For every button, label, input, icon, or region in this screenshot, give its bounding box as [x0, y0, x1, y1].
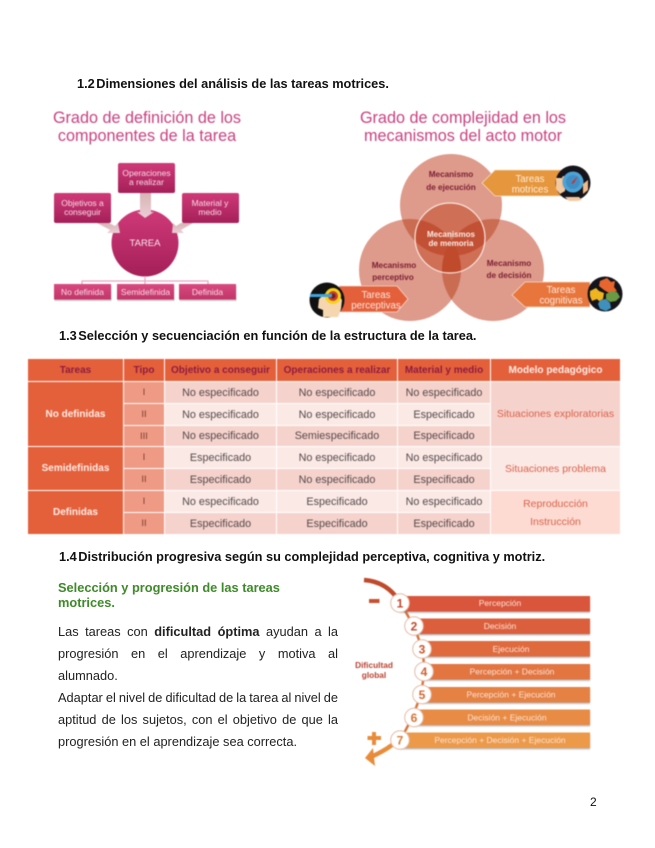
table: seleccion y secuenciacion: Semiespecificado — [295, 430, 379, 442]
table: seleccion y secuenciacion: No especificado — [182, 496, 259, 508]
text block: tareas con dificultad optima: progresión en el aprendizaje sea correcta. — [58, 734, 297, 749]
table: seleccion y secuenciacion: Instrucción — [530, 516, 581, 528]
table: seleccion y secuenciacion: Especificado — [413, 430, 475, 442]
diagram title: Grado de definición de los — [53, 109, 241, 127]
label: mecanismo de decision: de decisión — [486, 271, 532, 280]
step 4: percepcion + decision: Percepción + Decisión — [470, 666, 555, 676]
box: no definida — [54, 284, 112, 301]
box: objetivos a conseguir: conseguir — [64, 207, 101, 217]
label: dificultad global: global — [362, 670, 386, 680]
table: seleccion y secuenciacion: No especificado — [406, 452, 482, 464]
box: material y medio — [182, 193, 239, 223]
step 3: ejecucion — [413, 640, 590, 658]
table: seleccion y secuenciacion: I — [143, 452, 145, 463]
step 7: percepcion + decision + ejecucion: Percepción + Decisión + Ejecución — [434, 735, 566, 745]
step 6: decision + ejecucion: Decisión + Ejecución — [467, 712, 547, 722]
step 5: percepcion + ejecucion: 5 — [419, 688, 426, 702]
step 2: decision — [405, 617, 590, 635]
table: seleccion y secuenciacion: Especificado — [413, 408, 475, 420]
curved arrow spine — [364, 580, 424, 766]
diagram: grado de complejidad — [308, 110, 624, 322]
table: seleccion y secuenciacion: Especificado — [306, 518, 368, 530]
venn circles — [359, 154, 544, 321]
table: seleccion y secuenciacion: No especificado — [299, 408, 375, 420]
table: seleccion y secuenciacion: No especificado — [299, 474, 375, 486]
table: seleccion y secuenciacion: Modelo pedagógico — [509, 364, 602, 376]
box: objetivos a conseguir — [54, 193, 111, 223]
table: seleccion y secuenciacion: Operaciones a realizar — [284, 364, 390, 376]
arrow: tareas motrices — [482, 170, 563, 196]
subheading: seleccion y progresion: Selección y progresión de las tareas — [58, 580, 280, 595]
diagram title — [360, 109, 566, 145]
text block: tareas con dificultad optima: aptitud de los sujetos, con el objetivo de que la — [58, 712, 338, 727]
table: seleccion y secuenciacion: No especificado — [182, 386, 259, 398]
table: seleccion y secuenciacion: Especificado — [190, 452, 251, 464]
box: objetivos a conseguir: Objetivos a — [61, 198, 104, 208]
box: operaciones a realizar — [118, 163, 175, 193]
box: definida: Definida — [192, 287, 223, 297]
table: seleccion y secuenciacion: No especificado — [299, 386, 375, 398]
box: operaciones a realizar: Operaciones — [122, 168, 171, 178]
label: mecanismo perceptivo: perceptivo — [372, 273, 414, 282]
diagram title: mecanismos del acto motor — [364, 127, 563, 145]
step 7: percepcion + decision + ejecucion: 7 — [397, 734, 404, 748]
table: seleccion y secuenciacion: I — [143, 387, 145, 398]
table: seleccion y secuenciacion: III — [140, 430, 148, 442]
circle: tarea — [112, 210, 178, 276]
box: material y medio: medio — [198, 207, 222, 217]
heading 1.2: 1.2Dimensiones del análisis de las tareas motrices. — [77, 76, 389, 91]
label: mecanismo de ejecucion — [426, 170, 476, 192]
label: mecanismos de memoria: Mecanismos — [427, 230, 476, 239]
arrow: tareas perceptivas: perceptivas — [351, 300, 401, 312]
box: no definida: No definida — [61, 287, 104, 297]
step 1: percepcion: Percepción — [479, 598, 522, 608]
arrow: tareas cognitivas — [512, 282, 590, 307]
table: seleccion y secuenciacion: No especificado — [182, 430, 259, 442]
page number: 2 — [590, 795, 597, 809]
arrow: tareas motrices: Tareas — [515, 174, 545, 185]
table: seleccion y secuenciacion: Situaciones exploratorias — [497, 408, 614, 420]
minus sign — [369, 599, 380, 603]
step 7: percepcion + decision + ejecucion — [391, 731, 590, 749]
label: mecanismos de memoria: de memoria — [429, 239, 474, 248]
text block: tareas con dificultad optima: Las tareas con dificultad óptima ayudan a la — [58, 624, 338, 639]
heading 1.3: 1.3Selección y secuenciación en función de la estructura de la tarea. — [59, 328, 476, 343]
label: mecanismo de decision — [486, 259, 532, 280]
step 3: ejecucion: 3 — [419, 642, 426, 656]
text block: tareas con dificultad optima: Adaptar el nivel de dificultad de la tarea al nivel de — [58, 690, 338, 705]
subheading: seleccion y progresion: motrices. — [58, 595, 115, 610]
table: seleccion y secuenciacion: Especificado — [306, 496, 368, 508]
table: seleccion y secuenciacion: Reproducción — [523, 498, 588, 510]
box: definida — [179, 284, 236, 301]
diagram title: Grado de complejidad en los — [360, 109, 566, 127]
table: seleccion y secuenciacion: No especificado — [299, 452, 375, 464]
label: dificultad global: Dificultad — [355, 660, 393, 670]
table: seleccion y secuenciacion: No especificado — [406, 496, 482, 508]
table: seleccion y secuenciacion: Definidas — [53, 507, 98, 518]
table: seleccion y secuenciacion: Material y medio — [405, 364, 483, 376]
step 2: decision: Decisión — [484, 621, 517, 631]
heading 1.4: 1.4Distribución progresiva según su complejidad perceptiva, cognitiva y motriz. — [59, 549, 545, 564]
icon: stopwatch — [556, 166, 590, 201]
box: operaciones a realizar: a realizar — [129, 177, 164, 187]
step 4: percepcion + decision: 4 — [421, 665, 428, 679]
table: seleccion y secuenciacion — [27, 358, 621, 535]
arrow: tareas cognitivas: cognitivas — [539, 296, 583, 306]
table: seleccion y secuenciacion: No especificado — [182, 408, 259, 420]
arrow: tareas cognitivas: Tareas — [546, 285, 576, 296]
table: seleccion y secuenciacion: II — [141, 474, 147, 485]
icon: head with eye beam — [310, 282, 344, 318]
step 5: percepcion + ejecucion: Percepción + Ejecución — [466, 690, 556, 700]
table: seleccion y secuenciacion: I — [143, 496, 145, 507]
arrow: tareas perceptivas: Tareas — [361, 290, 391, 301]
subheading: seleccion y progresion — [58, 580, 280, 610]
label: dificultad global — [355, 660, 393, 680]
box: material y medio: Material y — [192, 198, 229, 208]
table: seleccion y secuenciacion: No especificado — [406, 386, 482, 398]
diagram title: componentes de la tarea — [58, 127, 236, 145]
label: mecanismo perceptivo — [372, 261, 416, 282]
step 3: ejecucion: Ejecución — [493, 644, 530, 654]
table: seleccion y secuenciacion: Situaciones problema — [505, 462, 606, 474]
arrow: tareas perceptivas — [339, 286, 408, 312]
diagram title — [53, 109, 241, 145]
table: seleccion y secuenciacion: II — [141, 409, 147, 420]
box: semidefinida — [117, 284, 174, 301]
label: mecanismo perceptivo: Mecanismo — [372, 261, 416, 270]
plus sign — [368, 732, 381, 745]
arrow: tareas motrices: motrices — [512, 184, 548, 196]
step 4: percepcion + decision — [415, 662, 590, 681]
text block: tareas con dificultad optima: alumnado. — [58, 668, 118, 683]
label: mecanismo de decision: Mecanismo — [487, 259, 531, 268]
label: mecanismo de ejecucion: Mecanismo — [429, 170, 473, 179]
step 6: decision + ejecucion: 6 — [411, 711, 418, 725]
circle: tarea: TAREA — [130, 238, 161, 249]
step 1: percepcion — [391, 594, 590, 612]
step 6: decision + ejecucion — [405, 708, 590, 727]
label: mecanismo de ejecucion: de ejecución — [426, 183, 476, 192]
icon: puzzle — [588, 276, 622, 312]
box: semidefinida: Semidefinida — [121, 287, 170, 297]
table: seleccion y secuenciacion: Especificado — [190, 474, 251, 486]
text block: tareas con dificultad optima: progresión en el aprendizaje y motiva al — [58, 646, 338, 661]
step 1: percepcion: 1 — [397, 596, 404, 610]
table: seleccion y secuenciacion: Especificado — [413, 518, 475, 530]
connector lines — [82, 276, 208, 284]
arrows into circle — [97, 193, 193, 233]
table: seleccion y secuenciacion: Especificado — [190, 518, 251, 530]
step 5: percepcion + ejecucion — [413, 685, 590, 704]
table: seleccion y secuenciacion: Objetivo a conseguir — [171, 364, 270, 376]
table: seleccion y secuenciacion: Especificado — [413, 474, 475, 486]
text block: tareas con dificultad optima — [58, 624, 338, 749]
table: seleccion y secuenciacion: Semidefinidas — [42, 463, 109, 474]
table: seleccion y secuenciacion: No definidas — [45, 408, 106, 420]
table: seleccion y secuenciacion: II — [141, 518, 147, 529]
step 2: decision: 2 — [411, 620, 418, 634]
table: seleccion y secuenciacion: Tipo — [134, 364, 154, 376]
table: seleccion y secuenciacion: Tareas — [60, 364, 91, 376]
label: mecanismos de memoria — [427, 230, 476, 248]
